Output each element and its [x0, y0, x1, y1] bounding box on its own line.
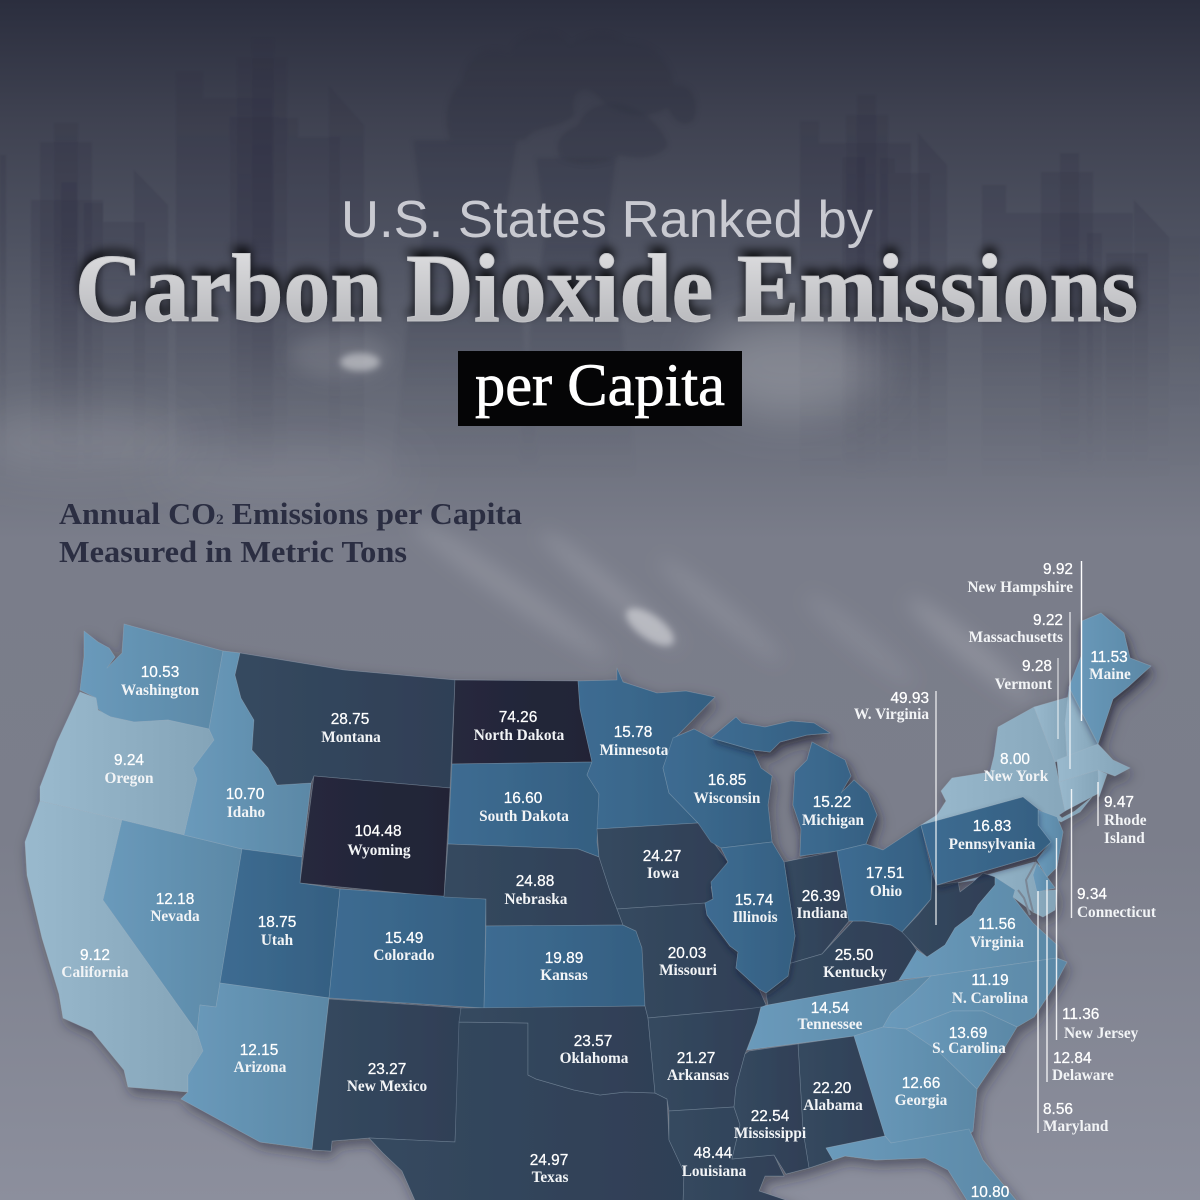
title badge: per Capita: per Capita — [475, 352, 725, 418]
state: Illinois — [705, 842, 795, 993]
state: Iowa: Iowa — [647, 865, 679, 882]
state: Missouri: Missouri — [659, 962, 718, 979]
state: New Jersey — [1037, 810, 1063, 877]
label: West Virginia — [854, 690, 929, 723]
state: Kentucky: Kentucky — [823, 964, 887, 981]
state: South Carolina: 13.69 — [949, 1025, 987, 1042]
state: Maine — [1069, 613, 1151, 744]
state: Louisiana: Louisiana — [682, 1163, 747, 1180]
state: Iowa: 24.27 — [643, 848, 681, 865]
state: Maine: Maine — [1089, 666, 1131, 683]
state: Texas — [369, 1022, 684, 1200]
state: Kansas — [484, 925, 645, 1008]
state: Utah — [220, 849, 340, 998]
water: Chesapeake Bay — [1018, 862, 1036, 915]
state: Arizona: 12.15 — [240, 1042, 278, 1059]
choropleth map of U.S. states — [25, 613, 1151, 1200]
label: Rhode Island: 9.47 — [1104, 794, 1134, 811]
subtitle: measure description: Annual CO 2 Emissions per Capita — [59, 496, 523, 531]
state: Arkansas: Arkansas — [667, 1067, 729, 1084]
state: Arizona: Arizona — [234, 1059, 287, 1076]
state: Missouri: 20.03 — [668, 945, 706, 962]
label: Massachusetts — [969, 612, 1063, 646]
state: Wyoming — [300, 776, 450, 897]
state: Minnesota — [578, 668, 715, 829]
state: Maryland — [957, 862, 1057, 917]
state: Alabama: 22.20 — [813, 1080, 851, 1097]
label: Connecticut: 9.34 — [1077, 886, 1107, 903]
state: New York — [921, 707, 1092, 825]
state: Oklahoma: 23.57 — [574, 1033, 612, 1050]
state: New York: 8.00 — [1000, 751, 1030, 768]
state: Mississippi — [732, 1044, 809, 1174]
label: Maryland — [1043, 1101, 1109, 1135]
state: Nevada: Nevada — [150, 908, 200, 925]
state: Indiana: Indiana — [796, 905, 848, 922]
label: West Virginia: W. Virginia — [854, 706, 929, 723]
label: New Hampshire: New Hampshire — [967, 579, 1073, 596]
subtitle: measure description: Measured in Metric Tons — [59, 534, 407, 569]
label: New Hampshire: 9.92 — [1043, 561, 1073, 578]
state: North Dakota: 74.26 — [499, 709, 537, 726]
label: Vermont: Vermont — [995, 676, 1053, 693]
state: Pennsylvania: 16.83 — [973, 818, 1011, 835]
state: North Carolina: N. Carolina — [952, 990, 1028, 1007]
state: Wyoming: Wyoming — [347, 842, 411, 859]
label: Vermont — [995, 658, 1053, 693]
leader lines for small states — [936, 561, 1098, 1133]
state: Nevada: 12.18 — [156, 891, 194, 908]
label: New Jersey: 11.36 — [1062, 1006, 1099, 1023]
state: New Mexico — [312, 999, 461, 1151]
label: New Jersey: New Jersey — [1064, 1025, 1139, 1042]
label: Delaware: 12.84 — [1053, 1050, 1092, 1067]
state: South Carolina: S. Carolina — [932, 1040, 1006, 1057]
state: Ohio — [837, 825, 932, 932]
state: Arkansas: 21.27 — [677, 1050, 715, 1067]
state: Ohio: 17.51 — [866, 865, 904, 882]
state: North Dakota — [452, 680, 592, 764]
state: California: 9.12 — [80, 947, 110, 964]
state: South Dakota: South Dakota — [479, 808, 569, 825]
state: Kentucky — [766, 921, 918, 1005]
state: Tennessee: Tennessee — [798, 1016, 863, 1033]
state: Arizona — [181, 983, 329, 1149]
state: Tennessee — [747, 976, 931, 1050]
state: Nevada — [103, 820, 242, 1032]
state: California: California — [61, 964, 129, 981]
label: Rhode Island: Island — [1104, 830, 1145, 847]
state: South Dakota — [448, 762, 599, 857]
state: Pennsylvania — [921, 797, 1051, 885]
state: Nebraska: Nebraska — [505, 891, 568, 908]
state: Oregon: 9.24 — [114, 752, 144, 769]
state: Missouri — [617, 903, 766, 1018]
smoke clouds — [0, 315, 1039, 711]
state: Oklahoma — [459, 1006, 655, 1095]
state: Washington: Washington — [121, 682, 200, 699]
state: Minnesota: 15.78 — [614, 724, 652, 741]
state: Virginia: Virginia — [970, 934, 1024, 951]
state: Iowa — [597, 823, 728, 909]
state: Florida — [826, 1129, 1020, 1200]
state: South Carolina — [906, 1011, 1017, 1089]
label: New Hampshire — [967, 561, 1073, 596]
label: Rhode Island — [1104, 794, 1147, 847]
state: Nebraska — [444, 844, 623, 926]
state: Wisconsin: 16.85 — [708, 772, 746, 789]
state: Oklahoma: Oklahoma — [560, 1050, 629, 1067]
label: Connecticut: Connecticut — [1077, 904, 1157, 921]
label: Maryland: Maryland — [1043, 1118, 1109, 1135]
state: Montana — [235, 653, 455, 788]
state: Virginia — [899, 877, 1057, 980]
state: Ohio: Ohio — [870, 883, 902, 900]
label: Delaware: Delaware — [1052, 1067, 1114, 1084]
state: Mississippi: Mississippi — [734, 1125, 807, 1142]
state: California — [25, 801, 203, 1092]
state: Washington: 10.53 — [141, 664, 179, 681]
state: Georgia: 12.66 — [902, 1075, 940, 1092]
label: Rhode Island: Rhode — [1104, 812, 1147, 829]
state: Louisiana: 48.44 — [694, 1145, 733, 1162]
state: Georgia: Georgia — [895, 1092, 948, 1109]
state: Rhode Island — [1098, 770, 1107, 797]
state: New York: New York — [984, 768, 1049, 785]
state: Montana: 28.75 — [331, 711, 369, 728]
state: Utah: Utah — [261, 932, 294, 949]
state: Massachusetts — [1057, 744, 1130, 782]
state: Michigan — [711, 717, 877, 856]
state: Wisconsin: Wisconsin — [694, 790, 761, 807]
label: Maryland: 8.56 — [1043, 1101, 1073, 1118]
label: West Virginia: 49.93 — [890, 690, 929, 707]
state: Illinois: 15.74 — [735, 892, 774, 909]
state: Texas: Texas — [532, 1169, 568, 1186]
state: Arkansas — [648, 1007, 761, 1111]
state: Wisconsin — [663, 729, 772, 848]
state: Indiana — [784, 851, 849, 964]
state: Kentucky: 25.50 — [835, 947, 873, 964]
state: Colorado: 15.49 — [385, 930, 423, 947]
state: Alabama: Alabama — [803, 1097, 863, 1114]
label: Massachusetts: 9.22 — [1033, 612, 1063, 629]
state: South Dakota: 16.60 — [504, 790, 542, 807]
state: Montana: Montana — [321, 729, 381, 746]
subtitle: measure description — [59, 496, 523, 569]
state: Nebraska: 24.88 — [516, 873, 554, 890]
label: New Jersey — [1062, 1006, 1139, 1042]
state: Washington — [80, 624, 223, 729]
title: Carbon Dioxide Emissions: Carbon Dioxide Emissions — [75, 235, 1138, 342]
state: Louisiana — [669, 1107, 800, 1200]
state: Mississippi: 22.54 — [751, 1108, 790, 1125]
state: Idaho: 10.70 — [226, 786, 264, 803]
label: Massachusetts: Massachusetts — [969, 629, 1063, 646]
state: Michigan: Michigan — [802, 812, 865, 829]
state: Connecticut — [1059, 770, 1099, 811]
state: North Carolina: 11.19 — [971, 972, 1009, 989]
state: Colorado: Colorado — [373, 947, 435, 964]
state: New Mexico: New Mexico — [347, 1078, 427, 1095]
city skyline and factory silhouettes — [40, 98, 1148, 400]
title: U.S. States Ranked by: U.S. States Ranked by — [341, 191, 873, 249]
state: Michigan: 15.22 — [813, 794, 851, 811]
state: Vermont — [1034, 697, 1069, 762]
state: Minnesota: Minnesota — [600, 742, 669, 759]
state: Virginia: 11.56 — [978, 916, 1016, 933]
state: Illinois: Illinois — [732, 909, 778, 926]
label: Vermont: 9.28 — [1022, 658, 1052, 675]
state: Oregon — [40, 692, 214, 835]
state: Alabama — [798, 1036, 885, 1168]
label: Connecticut — [1077, 886, 1157, 921]
state: North Dakota: North Dakota — [474, 727, 565, 744]
state: Colorado — [329, 889, 486, 1008]
state: Georgia — [854, 1027, 977, 1143]
state: Maine: 11.53 — [1090, 649, 1128, 666]
state: Texas: 24.97 — [530, 1152, 568, 1169]
state: New Mexico: 23.27 — [368, 1061, 406, 1078]
state: Tennessee: 14.54 — [811, 1000, 850, 1017]
state: Delaware — [1033, 863, 1055, 892]
state: Idaho: Idaho — [227, 804, 265, 821]
state: Utah: 18.75 — [258, 914, 296, 931]
state: Idaho — [184, 651, 311, 857]
state: Kansas: Kansas — [540, 967, 588, 984]
state: Oregon: Oregon — [104, 770, 154, 787]
state: West Virginia — [902, 873, 995, 957]
state: Kansas: 19.89 — [545, 950, 583, 967]
state: New Hampshire — [1065, 687, 1098, 758]
label: Delaware — [1052, 1050, 1114, 1084]
state: North Carolina — [883, 958, 1067, 1029]
state: Pennsylvania: Pennsylvania — [949, 836, 1036, 853]
state: Wyoming: 104.48 — [354, 823, 402, 840]
state: Indiana: 26.39 — [802, 888, 840, 905]
